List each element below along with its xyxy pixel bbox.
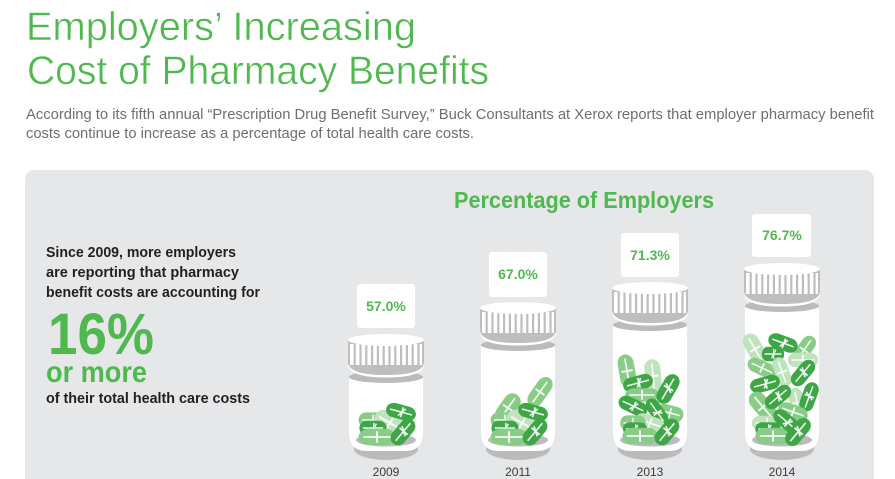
jar: 2013: 71.3% [630, 247, 670, 263]
callout: 16% or more: Since 2009, more employers [46, 245, 236, 261]
title: Employers’ Increasing [26, 5, 416, 49]
callout: 16% or more: 16% [48, 302, 154, 367]
jar: 2013: 2013 [637, 465, 664, 479]
chart heading: Percentage of Employers [454, 187, 714, 213]
jar: 2013 [612, 233, 688, 479]
jar: 2011: 67.0% [498, 266, 538, 282]
jar: 2014: 2014 [769, 465, 796, 479]
jar: 2009: 57.0% [366, 298, 406, 314]
intro paragraph [26, 106, 875, 142]
callout: 16% or more: of their total health care costs [46, 391, 250, 407]
jar: 2009: 2009 [373, 465, 400, 479]
jar: 2011 [480, 252, 556, 479]
callout: 16% or more: benefit costs are accounting for [46, 285, 260, 301]
jar: 2011: 2011 [505, 465, 531, 479]
intro paragraph: costs continue to increase as a percentage of total health care costs. [26, 125, 474, 142]
callout: 16% or more [46, 245, 260, 407]
callout: 16% or more: or more [46, 356, 147, 389]
jar: 2014: 76.7% [762, 227, 802, 243]
title: Cost of Pharmacy Benefits [27, 49, 489, 93]
intro paragraph: According to its fifth annual “Prescription Drug Benefit Survey,” Buck Consultants at Xerox reports that employer pharmacy benefit [26, 106, 875, 123]
jar: 2009 [348, 284, 424, 479]
panel: background [25, 170, 874, 479]
jar: 2014 [740, 214, 821, 479]
title [26, 5, 489, 93]
callout: 16% or more: are reporting that pharmacy [46, 265, 239, 281]
